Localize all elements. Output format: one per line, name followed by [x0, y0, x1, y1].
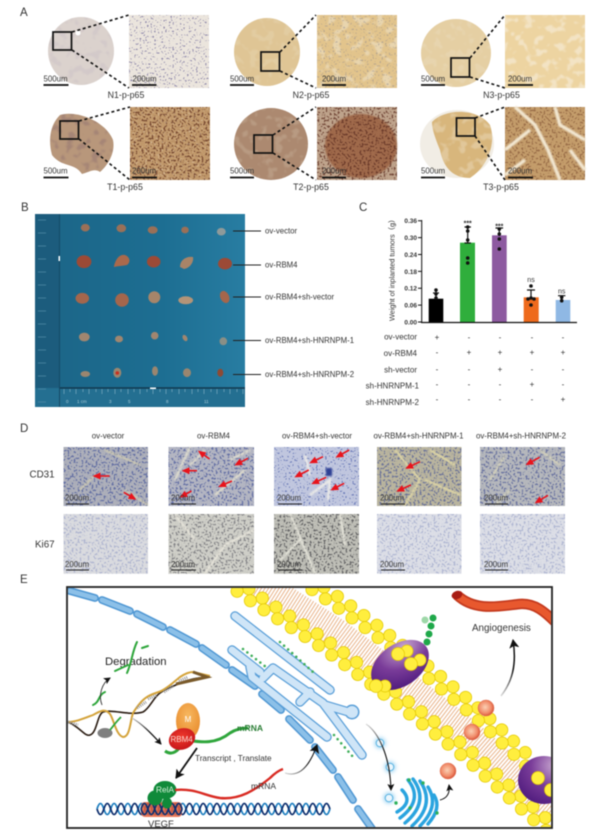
group labels with leader lines: ov-RBM4+sh-vector	[265, 292, 335, 302]
schematic contents	[67, 587, 552, 828]
Ki67 scale bars: 200um	[65, 560, 90, 569]
tile: T3-p-p65: 500um	[421, 166, 446, 176]
tile: N3-p-p65: N3-p-p65	[483, 90, 520, 100]
photo of excised tumors: 3	[109, 399, 112, 404]
row labels: Ki67	[35, 540, 55, 550]
group labels with leader lines: ov-RBM4+sh-HNRNPM-2	[265, 370, 354, 379]
translation arrow	[176, 748, 197, 778]
treatment matrix: ov-vector	[384, 332, 417, 342]
tile: N2-p-p65	[230, 15, 397, 100]
panel letter C: C	[359, 202, 367, 214]
treatment matrix: -	[499, 380, 502, 389]
panel C: tumor weight bar chart	[359, 202, 577, 407]
y axis ticks and labels: 0.30	[404, 235, 417, 242]
treatment matrix: +	[561, 395, 566, 404]
significance marks: ns	[558, 288, 566, 296]
tile: N2-p-p65: 500um	[230, 74, 255, 84]
tile: N1-p-p65	[44, 15, 209, 100]
tile: N2-p-p65: N2-p-p65	[293, 90, 329, 100]
CD31 scale bars: 200um	[484, 494, 509, 502]
row: ov-RBM4+sh-HNRNPM-1 tumors	[79, 332, 227, 345]
treatment matrix: -	[468, 333, 471, 342]
blood vessel	[450, 589, 555, 622]
photo of excised tumors: 5	[128, 399, 131, 404]
column headers: ov-RBM4+sh-vector	[282, 432, 352, 440]
label Degradation: Degradation	[105, 656, 167, 668]
x axis	[421, 322, 577, 324]
group labels with leader lines: ov-RBM4+sh-HNRNPM-1	[265, 336, 354, 345]
tile: T2-p-p65: 200um	[322, 166, 347, 176]
cell membrane bilayer	[230, 587, 552, 828]
group labels with leader lines: ov-vector	[265, 226, 297, 236]
y axis title: Weight of inplanted tumors（g）	[388, 216, 396, 321]
treatment matrix: -	[562, 365, 565, 374]
CD31 ov-RBM4+sh-HNRNPM-2	[480, 447, 565, 506]
Ki67 ov-vector	[64, 514, 148, 574]
treatment matrix: -	[499, 395, 502, 404]
column headers	[92, 432, 566, 440]
treatment matrix: -	[468, 395, 471, 404]
red mRNA	[175, 769, 283, 798]
panel A: tissue microarray staining	[20, 7, 585, 192]
column headers: ov-RBM4+sh-HNRNPM-2	[476, 432, 566, 440]
Ki67 scale bars: 200um	[171, 560, 196, 569]
treatment matrix: -	[499, 333, 502, 342]
treatment matrix: +	[530, 380, 535, 389]
CD31 ov-vector	[64, 447, 148, 506]
RelA transcription factor: RelA	[156, 784, 174, 794]
panel letter B: B	[21, 202, 29, 214]
column headers: ov-vector	[92, 432, 125, 440]
tile: N1-p-p65: N1-p-p65	[108, 90, 144, 100]
treatment matrix: +	[498, 365, 503, 374]
tile: T3-p-p65	[420, 107, 585, 192]
treatment matrix: -	[531, 365, 534, 374]
row labels: CD31	[30, 470, 55, 480]
tile: T1-p-p65: 500um	[44, 166, 68, 176]
treatment matrix: -	[531, 333, 534, 342]
red arrows	[100, 450, 548, 500]
treatment matrix: -	[436, 395, 439, 404]
CD31 scale bars: 200um	[65, 494, 90, 502]
treatment matrix: +	[467, 348, 472, 357]
group labels with leader lines	[233, 226, 354, 379]
vesicles	[374, 738, 396, 804]
degraded mRNA fragments	[93, 642, 148, 705]
row: ov-RBM4+sh-HNRNPM-2 tumors	[80, 366, 223, 378]
panel E: mechanism schematic	[20, 569, 572, 832]
treatment matrix: ov-RBM4	[384, 349, 418, 358]
bars	[429, 235, 570, 322]
group labels with leader lines: ov-RBM4	[265, 260, 298, 270]
significance marks: ns	[527, 277, 535, 284]
Ki67 ov-RBM4+sh-HNRNPM-1	[377, 514, 462, 574]
CD31 ov-RBM4+sh-HNRNPM-1	[377, 447, 462, 506]
tile: T1-p-p65	[44, 107, 210, 192]
row: ov-RBM4 tumors	[77, 255, 232, 270]
panel letter D: D	[20, 423, 28, 435]
treatment matrix: -	[436, 348, 439, 357]
treatment matrix: +	[561, 348, 566, 357]
y axis ticks and labels: 0.06	[404, 302, 417, 310]
export arrow	[285, 745, 317, 774]
photo of excised tumors: 8	[166, 399, 169, 404]
y axis ticks and labels: 0.00	[404, 320, 417, 326]
photo of excised tumors: 0	[66, 399, 69, 404]
CD31 scale bars: 200um	[171, 494, 196, 502]
panel letter E: E	[20, 574, 28, 586]
nuclear envelope	[70, 591, 373, 830]
label mRNA green: mRNA	[237, 723, 263, 733]
secreted VEGF balls	[440, 700, 494, 779]
column headers: ov-RBM4+sh-HNRNPM-1	[373, 432, 464, 440]
RelA transcription factor	[148, 781, 176, 808]
treatment matrix: +	[498, 348, 503, 357]
tile: N3-p-p65	[421, 15, 585, 100]
RBM4 complex with mRNA	[165, 703, 248, 753]
label Transcript, Translate: Transcript , Translate	[195, 754, 272, 763]
treatment matrix: -	[531, 395, 534, 404]
CD31 scale bars: 200um	[380, 494, 405, 502]
error bars and data points	[433, 225, 565, 307]
photo of excised tumors: 1 cm	[77, 399, 87, 404]
tile: T3-p-p65: T3-p-p65	[483, 182, 519, 192]
treatment matrix: -	[436, 365, 439, 374]
y axis ticks and labels: 0.18	[404, 269, 417, 276]
CD31 ov-RBM4	[168, 447, 254, 506]
Ki67 ov-RBM4	[168, 514, 254, 574]
curved arrow to RBM4	[132, 718, 161, 744]
tile: T3-p-p65: 200um	[508, 166, 533, 176]
row labels	[30, 470, 55, 550]
CD31 ov-RBM4+sh-vector	[274, 447, 359, 506]
treatment matrix: +	[530, 348, 535, 357]
treatment matrix: -	[468, 380, 471, 389]
tile: T1-p-p65: 200um	[132, 166, 157, 176]
significance marks: ***	[495, 224, 504, 230]
CD31 scale bars: 200um	[277, 494, 302, 502]
column headers: ov-RBM4	[197, 432, 231, 440]
tile: N1-p-p65: 200um	[132, 74, 157, 84]
label mRNA red: mRNA	[251, 781, 276, 791]
panel B: tumor photograph	[21, 202, 354, 407]
treatment matrix: -	[436, 380, 439, 389]
RBM4 complex with mRNA: M	[185, 715, 192, 724]
Ki67 ov-RBM4+sh-vector	[274, 514, 359, 574]
significance marks	[464, 220, 566, 296]
tile: T2-p-p65: 500um	[230, 166, 255, 176]
RBM4 complex with mRNA: RBM4	[170, 735, 193, 744]
treatment matrix: -	[562, 380, 565, 389]
CD31 scale bars	[65, 494, 509, 504]
panel letter A: A	[20, 7, 28, 19]
treatment matrix: -	[468, 365, 471, 374]
tile: N3-p-p65: 500um	[421, 74, 446, 84]
Ki67 row	[64, 514, 565, 574]
vesicle transport arrow	[366, 724, 391, 790]
photo of excised tumors: 11	[204, 399, 209, 404]
receptor protein with sugar chain	[368, 614, 438, 694]
small curved arrow	[100, 678, 110, 705]
treatment matrix: sh-HNRNPM-1	[366, 382, 420, 390]
Ki67 scale bars	[65, 560, 509, 570]
significance marks: ***	[464, 220, 472, 228]
tile: T2-p-p65: T2-p-p65	[293, 182, 329, 192]
tile: N3-p-p65: 200um	[508, 74, 533, 84]
label Angiogenesis: Angiogenesis	[472, 623, 531, 634]
panel D: CD31 and Ki67 staining	[20, 423, 566, 574]
y axis ticks and labels: 0.36	[404, 218, 417, 225]
treatment matrix: -	[562, 333, 565, 342]
label VEGF: VEGF	[148, 819, 174, 830]
VEGF promoter highlight	[141, 802, 182, 817]
lower DNA double helix	[97, 804, 330, 814]
row: ov-RBM4+sh-vector tumors	[76, 289, 231, 307]
tile: T2-p-p65	[230, 107, 397, 192]
endoplasmic reticulum	[232, 616, 362, 758]
Ki67 ov-RBM4+sh-HNRNPM-2	[480, 514, 565, 574]
tile: T1-p-p65: T1-p-p65	[107, 182, 143, 192]
treatment matrix: sh-HNRNPM-2	[366, 398, 420, 407]
photo of excised tumors	[35, 214, 245, 407]
DNA helix with polymerase	[67, 672, 210, 738]
CD31 row	[64, 447, 565, 506]
Ki67 scale bars: 200um	[484, 560, 509, 569]
row: ov-vector tumors	[81, 224, 226, 236]
angiogenesis arrow	[501, 640, 514, 696]
Ki67 scale bars: 200um	[277, 560, 302, 569]
treatment matrix: +	[435, 333, 440, 342]
golgi apparatus	[394, 778, 439, 826]
golgi to ball arrow	[440, 785, 449, 800]
treatment matrix: sh-vector	[384, 366, 417, 374]
tile: N2-p-p65: 200um	[322, 74, 347, 84]
y axis ticks and labels: 0.24	[404, 252, 417, 259]
second receptor protein	[517, 755, 552, 805]
tile: N1-p-p65: 500um	[44, 74, 68, 84]
schematic frame	[67, 587, 552, 828]
treatment matrix	[366, 332, 566, 407]
Ki67 scale bars: 200um	[380, 560, 405, 569]
y axis ticks and labels: 0.12	[404, 286, 417, 292]
y axis ticks and labels	[404, 218, 422, 326]
